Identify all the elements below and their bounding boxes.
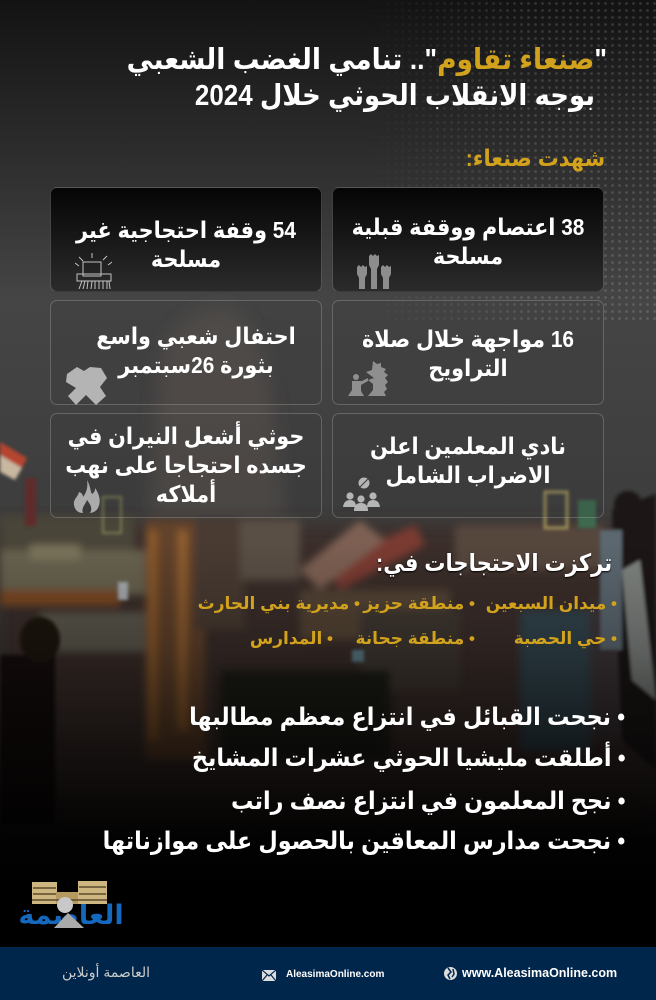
- heading: protests concentrated in: تركزت الاحتجاجات في:: [376, 550, 612, 577]
- card text: التراويح: [428, 355, 508, 381]
- panel: protest stands: [50, 187, 322, 292]
- list: protest locations: [198, 594, 617, 648]
- location: Bani Al-Harith: • مديرية بني الحارث: [198, 594, 360, 613]
- card text: [370, 433, 566, 488]
- icon: envelope: [262, 970, 276, 981]
- card text: احتفال شعبي واسع: [96, 323, 296, 349]
- subheading: Sanaa witnessed: شهدت صنعاء:: [466, 145, 605, 171]
- location: schools: • المدارس: [250, 629, 333, 648]
- title: "صنعاء تقاوم".. تنامي الغضب الشعبي: [127, 44, 607, 76]
- panel: September 26 celebration: [50, 300, 322, 405]
- logo buildings: [32, 881, 107, 928]
- card text: بثورة 26سبتمبر: [118, 352, 274, 378]
- icon: raised fists: [357, 254, 391, 289]
- card text: [96, 323, 296, 378]
- logo: Al-Asima: [18, 881, 124, 930]
- card text: حوثي أشعل النيران في: [68, 423, 304, 449]
- footer: website: www.AleasimaOnline.com: [462, 966, 617, 980]
- outcome: teachers: • نجح المعلمون في انتزاع نصف راتب: [231, 788, 625, 815]
- location: Hizyaz: • منطقة حزيز: [363, 594, 475, 613]
- icon: figure facing monster: [348, 361, 388, 396]
- location: Al-Sabeen: • ميدان السبعين: [486, 594, 617, 613]
- icon: globe: [444, 967, 457, 980]
- title: [127, 44, 607, 112]
- list: outcomes: [102, 704, 625, 855]
- card text: الاضراب الشامل: [386, 462, 550, 488]
- panel: Taraweeh confrontations: [332, 300, 604, 405]
- icon: flame: [74, 480, 100, 513]
- outcome: tribes: • نجحت القبائل في انتزاع معظم مطالبها: [189, 704, 625, 731]
- card text: نادي المعلمين اعلن: [370, 433, 566, 459]
- card text: [352, 214, 584, 269]
- card text: 16 مواجهة خلال صلاة: [362, 326, 574, 352]
- panel: Houthi self-immolation: [50, 413, 322, 518]
- card text: أملاكه: [156, 481, 216, 507]
- outcome: disabled schools: • نجحت مدارس المعاقين بالحصول على موازناتها: [102, 828, 625, 855]
- outcome: sheikhs released: • أطلقت مليشيا الحوثي عشرات المشايخ: [191, 745, 625, 772]
- card text: [75, 217, 296, 272]
- icon: protest crowd: [75, 253, 112, 289]
- card text: 38 اعتصام ووقفة قبلية: [352, 214, 584, 240]
- card text: [362, 326, 574, 382]
- footer: brand name: العاصمة أونلاين: [62, 964, 150, 980]
- panel: teachers club strike: [332, 413, 604, 518]
- location: Jadhana: • منطقة جحانة: [355, 629, 475, 648]
- card text: 54 وقفة احتجاجية غير: [76, 217, 296, 243]
- panel: sit-ins: [332, 187, 604, 292]
- card text: مسلحة: [151, 246, 221, 272]
- title: بوجه الانقلاب الحوثي خلال 2024: [195, 80, 595, 112]
- icon: clasped hands: [66, 367, 107, 405]
- footer: email: AleasimaOnline.com: [286, 969, 384, 980]
- footer bar: [0, 947, 656, 1000]
- card text: [65, 421, 307, 507]
- card text: جسده احتجاجا على نهب: [65, 452, 307, 478]
- icon: group of people: [343, 478, 380, 511]
- logo wordmark: العاصمة: [18, 900, 124, 930]
- location: Hasaba: • حي الحصبة: [514, 629, 617, 648]
- card text: مسلحة: [433, 243, 503, 269]
